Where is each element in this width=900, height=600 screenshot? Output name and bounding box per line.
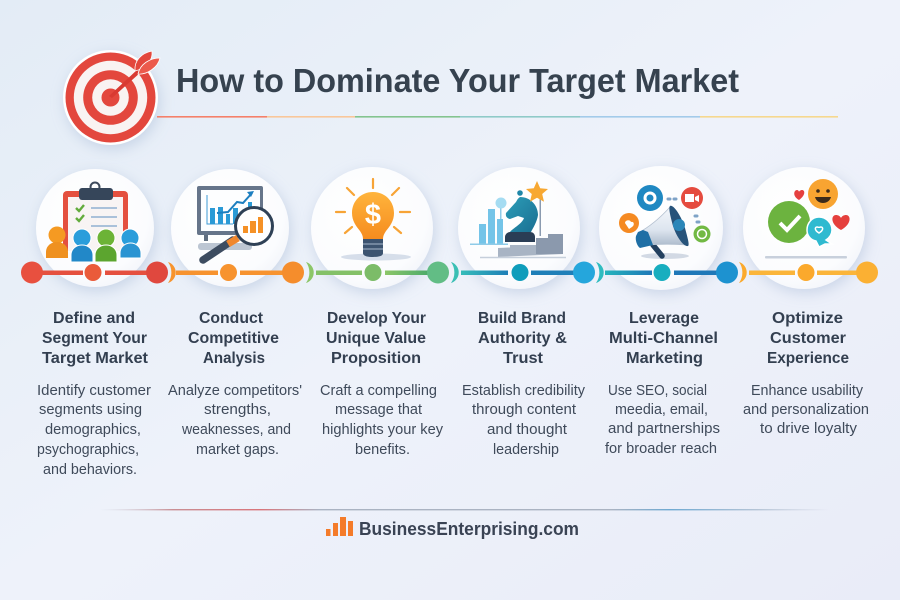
heading: step 6: Customer [770,330,846,347]
text: step 2 description: strengths, [204,402,271,418]
icon: check badge, smiley and hearts [765,179,850,258]
heading: step 4: Authority & [478,330,567,347]
heading: step 2: Analysis [203,350,265,367]
text: step 3 description: highlights your key [322,422,444,438]
icon: chess knight, star, chart and stairs [470,181,566,258]
heading: step 4: Build Brand [478,310,566,327]
heading: step 6: Experience [767,350,849,367]
text: step 1 description: psychographics, [37,442,139,458]
footer rule [100,509,830,510]
text: step 3 description [320,383,444,458]
text: step 5 description: Use SEO, social [608,383,707,399]
timeline segment 6 [739,262,878,284]
heading: step 2: Competitive [188,330,279,347]
text: step 6 description: to drive loyalty [760,421,858,437]
panel: step 1 icon disc [36,169,154,287]
text: step 2 description: weaknesses, and [181,422,291,438]
title: How to Dominate Your Target Market [176,62,739,99]
text: step 4 description [462,383,586,458]
text: step 4 description: leadership [493,442,559,458]
heading: step 1: Target Market [42,350,148,367]
title rule [157,116,838,118]
text: step 3 description: Craft a compelling [320,383,437,399]
timeline segment 4 [451,262,595,284]
panel: step 5 icon disc [599,166,723,290]
panel: step 4 icon disc [458,167,580,289]
panel: step 2 icon disc [171,169,289,287]
text: step 4 description: through content [472,402,576,418]
heading: step 6: Optimize [772,310,843,327]
text: step 6 description [743,383,869,437]
heading: step 3: Develop Your [327,310,426,327]
text: step 6 description: Enhance usability [751,383,864,399]
heading: step 1 [42,310,148,367]
text: step 2 description [168,383,302,458]
heading: step 1: Define and [53,310,135,327]
icon: light bulb with dollar sign: $ [365,199,381,231]
text: step 4 description: and thought [487,422,567,438]
heading: step 3: Unique Value [326,330,426,347]
timeline segment 5 [596,262,738,284]
icon: megaphone with channel badges [619,185,710,259]
text: step 6 description: and personalization [743,402,869,418]
timeline segment 1 [21,262,168,284]
text: step 1 description [37,383,151,478]
text: step 1 description: and behaviors. [43,462,137,478]
text: step 5 description: and partnerships [608,421,720,437]
panel: step 3 icon disc [311,167,433,289]
heading: step 3 [326,310,426,367]
heading: step 5: Multi-Channel [609,330,718,347]
text: step 2 description: Analyze competitors' [168,383,302,399]
footer logo: bar chart icon [326,517,353,536]
footer brand name: BusinessEnterprising.com [359,519,579,539]
panel: step 6 icon disc [743,167,865,289]
text: step 1 description: Identify customer [37,383,151,399]
heading: step 4: Trust [503,350,543,367]
icon: monitor and magnifier [197,186,272,260]
heading: step 5: Marketing [626,350,703,367]
heading: step 6 [767,310,849,367]
text: step 2 description: market gaps. [196,442,279,458]
timeline segment 3 [306,262,449,284]
text: step 1 description: demographics, [45,422,141,438]
icon: target with dart [63,50,160,145]
heading: step 2: Conduct [199,310,263,327]
heading: step 5 [609,310,718,367]
heading: step 4 [478,310,567,367]
icon: clipboard and people [46,182,141,262]
heading: step 1: Segment Your [42,330,147,347]
text: step 3 description: benefits. [355,442,410,458]
heading: step 5: Leverage [629,310,699,327]
timeline segment 2 [168,262,304,284]
text: step 5 description: for broader reach [605,441,717,457]
heading: step 3: Proposition [331,350,421,367]
text: step 5 description [605,383,720,457]
text: step 1 description: segments using [39,402,142,418]
heading: step 2 [188,310,279,367]
text: step 3 description: message that [335,402,422,418]
text: step 5 description: meedia, email, [615,402,708,418]
text: step 4 description: Establish credibility [462,383,586,399]
